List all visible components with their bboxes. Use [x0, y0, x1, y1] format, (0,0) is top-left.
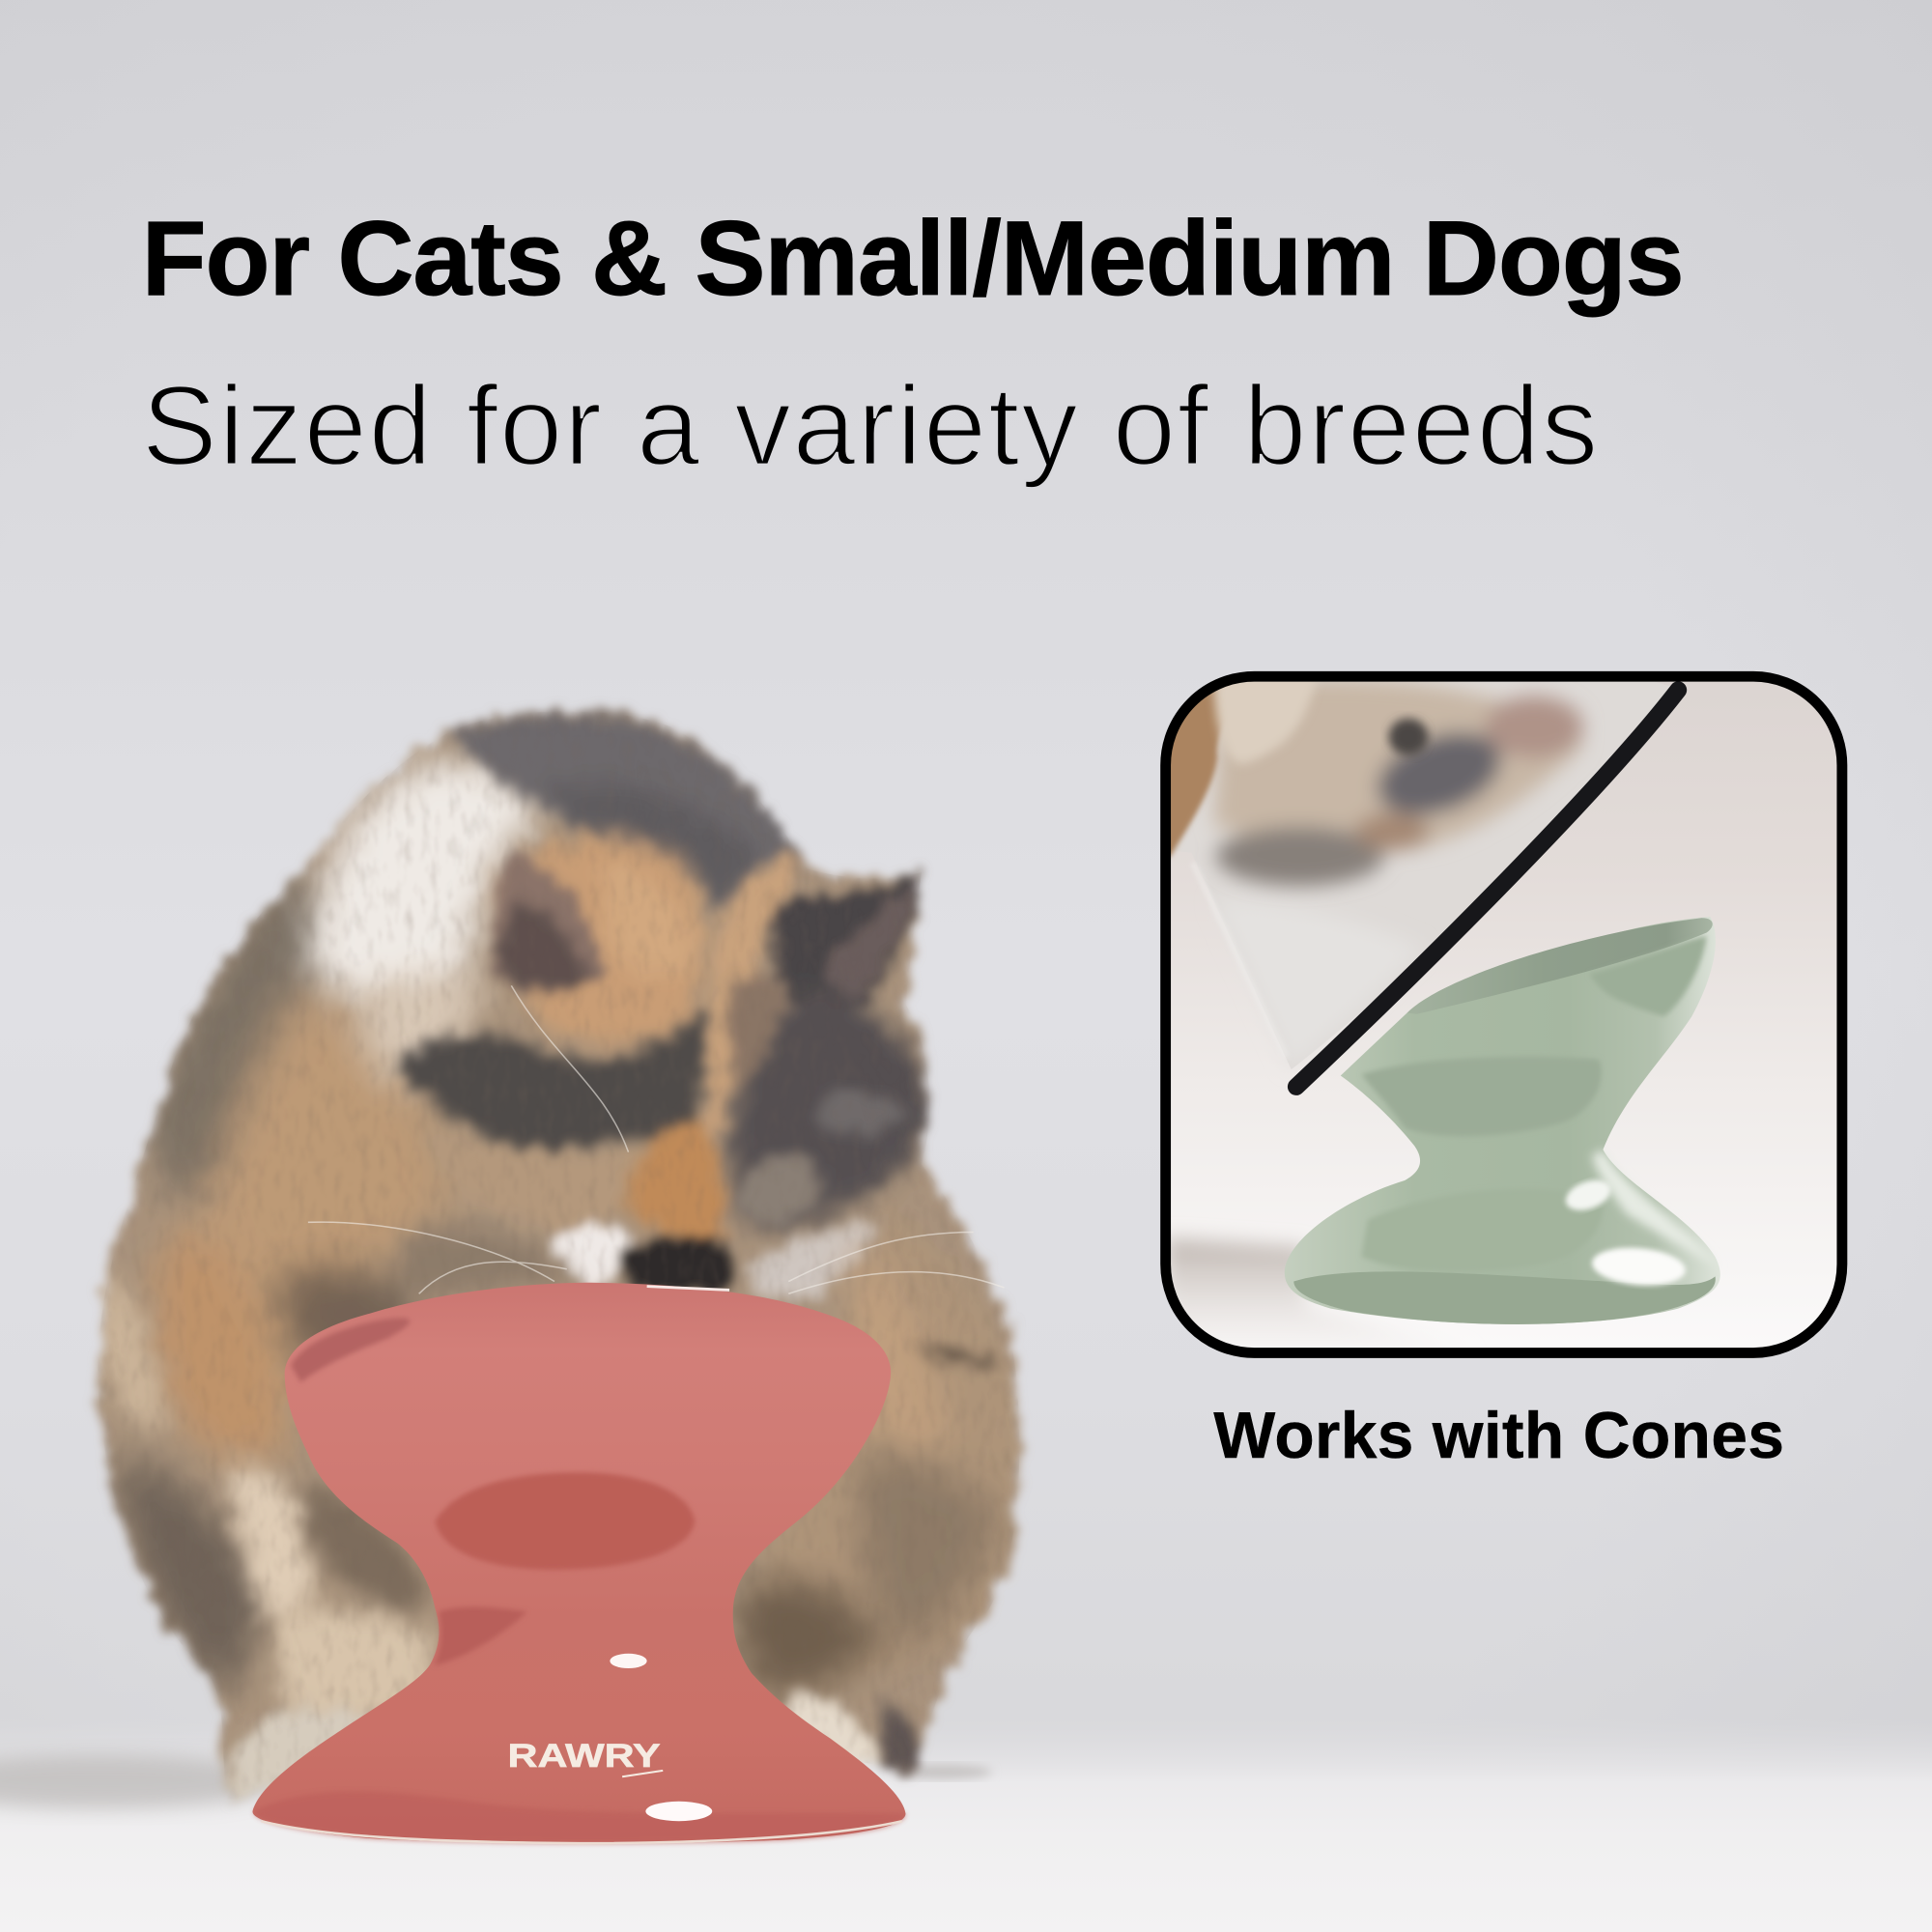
- cone black rim: [1296, 690, 1678, 1087]
- logo swoosh: [622, 1771, 663, 1776]
- dark curl in fur: [1389, 719, 1428, 755]
- right body: [752, 1208, 1018, 1688]
- card caption: Works with Cones: [1213, 1400, 1784, 1472]
- right ear: [772, 872, 922, 1020]
- highlight upper: [610, 1654, 647, 1668]
- rim highlight: [647, 1287, 729, 1290]
- brand logo: RAWRY: [508, 1738, 661, 1775]
- photo: calico cat eating: [74, 690, 1047, 1805]
- body reflection: [1361, 1057, 1602, 1136]
- dark flank patches: [276, 1267, 425, 1368]
- inset photo card: cone with green bowl: [1158, 666, 1848, 1361]
- title: For Cats & Small/Medium Dogs: [142, 200, 1685, 318]
- right paw: [788, 1697, 881, 1768]
- highlight small: [1562, 1175, 1615, 1216]
- face dark mask left: [392, 1010, 707, 1152]
- bowl reflection: [435, 1472, 695, 1570]
- nose bridge orange: [626, 1118, 724, 1251]
- green bowl: [1285, 917, 1720, 1324]
- muzzle white: [552, 1225, 629, 1292]
- left paw: [226, 1709, 394, 1805]
- cheek tan left: [469, 1140, 636, 1229]
- floor shadow: [1166, 1238, 1479, 1353]
- left flank grey-brown: [154, 863, 339, 1203]
- neck band: [434, 1607, 527, 1665]
- tan left of muzzle: [394, 1228, 579, 1293]
- cone left edge: [1193, 863, 1287, 1057]
- bowl dark glare left: [291, 1318, 410, 1382]
- highlight large: [1590, 1244, 1687, 1290]
- card border: [1166, 676, 1842, 1353]
- fur seen through cone: [1213, 679, 1583, 886]
- highlight lower: [645, 1802, 712, 1821]
- inner bowl: [1407, 918, 1713, 1014]
- head orange: [498, 838, 701, 1046]
- inset background: [1158, 666, 1848, 1361]
- bowl body: [1285, 917, 1720, 1324]
- right cheek: [752, 1225, 877, 1300]
- base lower shade: [254, 1792, 905, 1843]
- forehead stripe: [705, 856, 801, 1140]
- photo: coral ceramic bowl: [252, 1283, 905, 1843]
- subtitle: Sized for a variety of breeds: [142, 362, 1598, 489]
- light band on bowl right: [1592, 1150, 1719, 1266]
- face grey mask right: [729, 989, 934, 1230]
- left ear: [491, 845, 604, 991]
- cat body silhouette: [98, 711, 1019, 1805]
- dark nose: [626, 1237, 733, 1293]
- base lower band: [1293, 1271, 1716, 1324]
- fade at cone bottom: [1213, 899, 1423, 1069]
- grey back: [450, 714, 807, 912]
- rim front band: [1589, 936, 1707, 1016]
- white shoulder: [308, 760, 538, 1005]
- frosted cone: [1166, 666, 1678, 1069]
- bowl body: [252, 1283, 905, 1843]
- peach flank: [186, 985, 456, 1454]
- fur tuft top left: [1166, 671, 1251, 856]
- base shadow: [1361, 1189, 1605, 1272]
- base foot edge: [261, 1821, 902, 1843]
- whiskers: [308, 985, 1005, 1293]
- left foreleg: [228, 1465, 314, 1619]
- fur texture: [74, 690, 1047, 1799]
